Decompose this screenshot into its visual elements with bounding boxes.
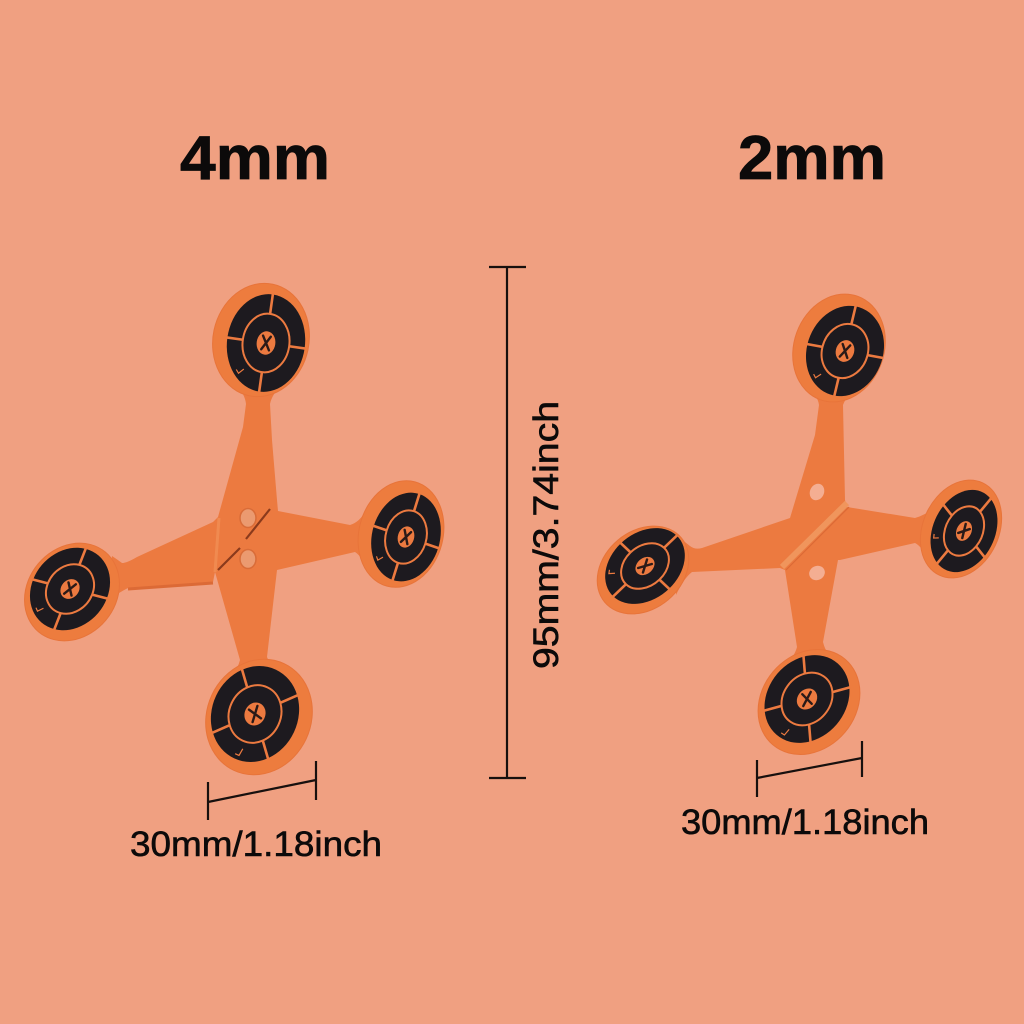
left width dimension line — [208, 761, 316, 820]
disc: top — [778, 281, 900, 415]
height dimension line — [489, 267, 526, 778]
4mm target body — [108, 385, 366, 676]
disc: right — [346, 471, 456, 597]
2mm target — [580, 281, 1017, 775]
2mm target body — [676, 385, 938, 668]
4mm target — [5, 274, 456, 792]
disc: bottom — [737, 629, 881, 775]
right width label: 30mm/1.18inch — [681, 803, 929, 842]
title: 4mm: 4mm — [180, 124, 330, 193]
disc: top — [202, 274, 320, 406]
disc: left — [5, 524, 139, 660]
height label: 95mm/3.74inch — [527, 401, 566, 669]
disc: right — [905, 467, 1017, 591]
right width dimension line — [757, 741, 862, 797]
title: 2mm: 2mm — [738, 124, 886, 193]
disc: left — [580, 508, 706, 632]
left width label: 30mm/1.18inch — [130, 825, 382, 864]
disc: bottom — [187, 642, 331, 792]
